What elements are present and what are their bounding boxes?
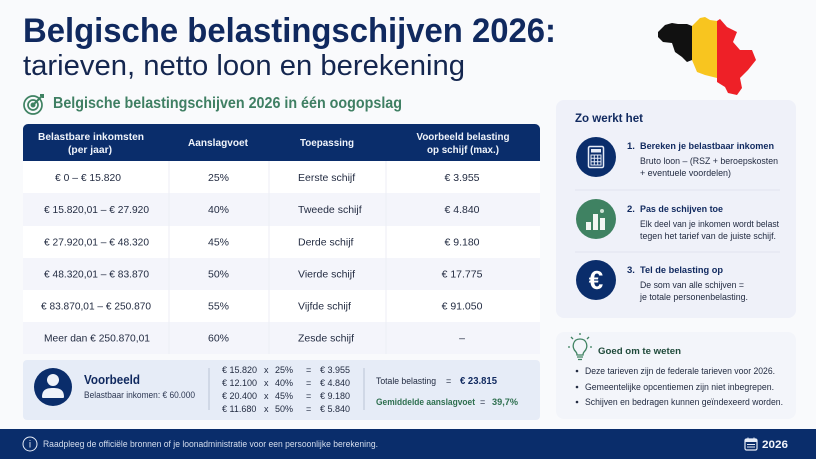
calculation: =: [306, 378, 311, 388]
table text: Derde schijf: [298, 236, 354, 248]
step 3 text: 3.: [627, 265, 635, 276]
calculation: x: [264, 391, 269, 401]
table text: € 15.820,01 – € 27.920: [44, 204, 149, 216]
step 2 text: Pas de schijven toe: [640, 204, 723, 215]
calculation: € 4.840: [320, 378, 350, 388]
table text: Eerste schijf: [298, 172, 355, 184]
icon: target: [24, 95, 44, 114]
table text: Meer dan € 250.870,01: [44, 332, 150, 344]
title: [23, 12, 556, 82]
calculation: € 11.680: [222, 404, 256, 414]
step 2 text: 2.: [627, 204, 635, 215]
table text: Vijfde schijf: [298, 300, 351, 312]
icon: info: [23, 437, 37, 451]
calculation: € 12.100: [222, 378, 257, 388]
calculation: 50%: [275, 404, 293, 414]
table header: Toepassing: [300, 137, 354, 149]
calculation: € 15.820: [222, 365, 257, 375]
table text: € 4.840: [444, 204, 480, 216]
icon: calculator: [576, 137, 616, 177]
panel: voorbeeld: Voorbeeld: [84, 372, 140, 387]
calculation: x: [264, 365, 269, 375]
table header: (per jaar): [68, 144, 112, 156]
table header: op schijf (max.): [427, 144, 499, 156]
icon: bar chart: [576, 199, 616, 239]
calculation: [222, 365, 350, 414]
panel: voorbeeld: Belastbaar inkomen: € 60.000: [84, 390, 195, 400]
table text: € 3.955: [444, 172, 480, 184]
icon: euro: [576, 260, 616, 300]
step 1 text: 1.: [627, 141, 635, 152]
icon: info: i: [29, 440, 31, 450]
table text: 45%: [208, 236, 229, 248]
footer bar: [0, 429, 816, 459]
table text: 60%: [208, 332, 229, 344]
calculation: =: [306, 391, 311, 401]
bullet list: Deze tarieven zijn de federale tarieven voor 2026.: [585, 366, 775, 376]
table text: 55%: [208, 300, 229, 312]
result: 39,7%: [492, 397, 518, 407]
table text: € 48.320,01 – € 83.870: [44, 268, 149, 280]
table text: € 9.180: [444, 236, 480, 248]
icon: light bulb: [568, 333, 592, 360]
calculation: € 3.955: [320, 365, 350, 375]
step 3 text: Tel de belasting op: [640, 265, 723, 276]
table text: € 83.870,01 – € 250.870: [41, 300, 151, 312]
calculation: =: [306, 404, 311, 414]
table text: Tweede schijf: [298, 204, 362, 216]
calculation: =: [306, 365, 311, 375]
step 3 text: [627, 265, 748, 302]
table text: € 17.775: [442, 268, 483, 280]
step 1 text: + eventuele voordelen): [640, 168, 731, 178]
table text: € 27.920,01 – € 48.320: [44, 236, 149, 248]
table text: [41, 172, 483, 344]
panel: zo werkt het: [556, 100, 796, 318]
step 2 text: tegen het tarief van de juiste schijf.: [640, 231, 776, 241]
footer bar: 2026: [762, 439, 788, 451]
table text: –: [459, 332, 465, 344]
result: Gemiddelde aanslagvoet: [376, 397, 475, 407]
step 1 text: [627, 141, 778, 178]
result: Totale belasting: [376, 376, 436, 386]
section heading: Belgische belastingschijven 2026 in één oogopslag: [53, 95, 402, 112]
table rows background: [23, 161, 540, 354]
icon: person: [34, 368, 72, 406]
result: =: [446, 376, 451, 386]
step 2 text: Elk deel van je inkomen wordt belast: [640, 219, 779, 229]
calculation: € 5.840: [320, 404, 350, 414]
calculation: 40%: [275, 378, 293, 388]
step 2 text: [627, 204, 779, 241]
bullet list: Gemeentelijke opcentiemen zijn niet inbegrepen.: [585, 382, 774, 392]
result: =: [480, 397, 485, 407]
footer bar: Raadpleeg de officiële bronnen of je loonadministratie voor een persoonlijke berekening.: [43, 439, 378, 449]
panel: goed om te weten: [556, 332, 796, 419]
table header: Aanslagvoet: [188, 137, 248, 149]
table text: 50%: [208, 268, 229, 280]
table: tax brackets: [23, 124, 540, 354]
table header: Voorbeeld belasting: [416, 131, 510, 143]
table text: € 91.050: [442, 300, 483, 312]
step 1 text: Bruto loon – (RSZ + beroepskosten: [640, 156, 778, 166]
table text: Zesde schijf: [298, 332, 354, 344]
table text: Vierde schijf: [298, 268, 355, 280]
bullet list: [576, 366, 783, 407]
icon: euro: €: [589, 265, 603, 295]
step 3 text: De som van alle schijven =: [640, 280, 744, 290]
panel: zo werkt het: Zo werkt het: [575, 111, 643, 125]
icon: calendar: [745, 438, 757, 450]
result: [376, 376, 518, 407]
table header: Belastbare inkomsten: [38, 131, 144, 143]
table text: € 0 – € 15.820: [55, 172, 121, 184]
table text: 25%: [208, 172, 229, 184]
table header: [23, 124, 540, 161]
bullet list: Schijven en bedragen kunnen geïndexeerd worden.: [585, 397, 783, 407]
calculation: € 20.400: [222, 391, 257, 401]
panel: goed om te weten: Goed om te weten: [598, 346, 681, 357]
calculation: 45%: [275, 391, 293, 401]
title: tarieven, netto loon en berekening: [23, 50, 465, 82]
icon: Belgium flag map: [658, 17, 756, 95]
calculation: € 9.180: [320, 391, 350, 401]
title: Belgische belastingschijven 2026:: [23, 12, 556, 50]
step 1 text: Bereken je belastbaar inkomen: [640, 141, 774, 152]
panel: voorbeeld: [23, 360, 540, 420]
calculation: x: [264, 378, 269, 388]
result: € 23.815: [460, 376, 497, 387]
step 3 text: je totale personenbelasting.: [639, 292, 748, 302]
calculation: x: [264, 404, 269, 414]
table text: 40%: [208, 204, 229, 216]
calculation: 25%: [275, 365, 293, 375]
